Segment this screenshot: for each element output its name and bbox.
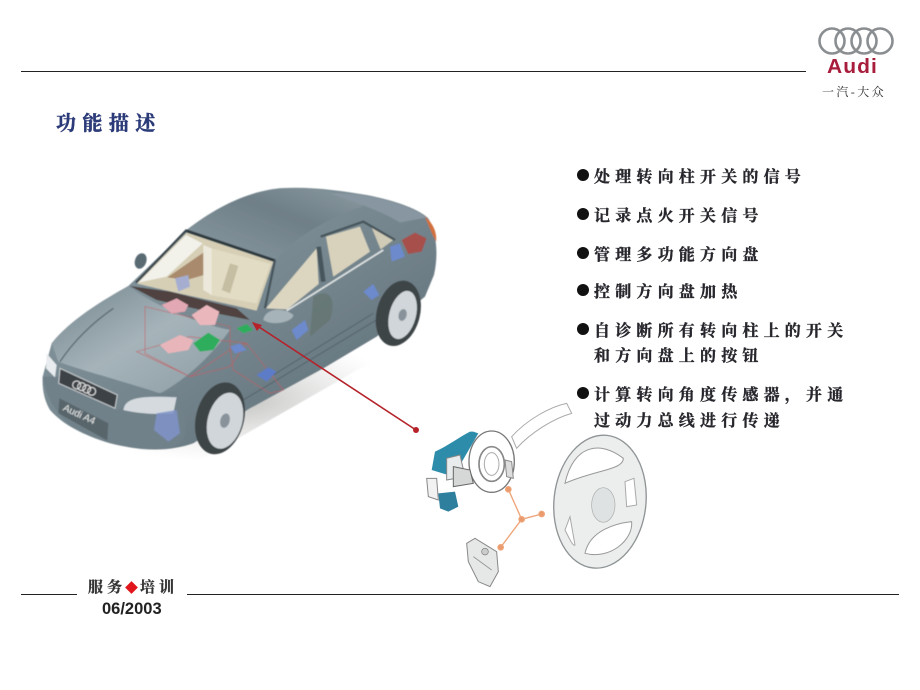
mirrors (133, 252, 149, 270)
item 5 (577, 322, 848, 365)
illustration: steering wheel (547, 431, 653, 573)
plate (58, 398, 108, 441)
front wheel (187, 377, 253, 460)
illustration: car with components: Audi A4 (61, 403, 97, 427)
modules (162, 298, 188, 313)
footer: service training: 服务 (88, 580, 126, 596)
item 3: 管理多功能方向盘 (594, 247, 764, 264)
item 5: 自诊断所有转向柱上的开关 (594, 323, 848, 340)
ground shadow (53, 337, 407, 462)
logo: Audi FAW-VW: Audi (827, 56, 878, 78)
door lines (243, 313, 377, 400)
item 6: 过动力总线进行传递 (594, 413, 785, 430)
rings on grille (73, 381, 96, 395)
hood (52, 286, 230, 393)
footer: date: 06/2003 (102, 600, 162, 618)
illustration: steering angle sensor (467, 538, 498, 587)
title: 功能描述 (56, 113, 162, 135)
item 6: 计算转向角度传感器，并通 (594, 387, 848, 404)
icon: red diamond (125, 581, 138, 594)
front blue component (154, 410, 180, 442)
item 1: 处理转向柱开关的信号 (594, 169, 806, 186)
item 4: 控制方向盘加热 (594, 284, 742, 301)
wiring outlines (137, 307, 283, 393)
bumper and grille (43, 377, 185, 448)
headlights (123, 397, 177, 414)
side windows (266, 248, 319, 309)
windshield and interior (137, 233, 273, 311)
footer: service training (88, 579, 178, 596)
trunk (330, 193, 427, 223)
item 6 (577, 386, 848, 430)
item 2: 记录点火开关信号 (594, 208, 764, 225)
car body (43, 188, 436, 450)
logo: Audi FAW-VW: 一汽-大众 (822, 85, 886, 99)
connector: orange network (498, 487, 544, 550)
illustration: steering column switch (427, 403, 572, 512)
item 5: 和方向盘上的按钮 (594, 348, 764, 365)
function list (577, 168, 848, 430)
tail light (425, 217, 436, 242)
roof (187, 188, 363, 260)
arrow: car to components (252, 322, 419, 433)
logo: Audi FAW-VW (818, 27, 894, 99)
rear wheel (369, 276, 428, 351)
footer: service training: 培训 (140, 580, 178, 596)
